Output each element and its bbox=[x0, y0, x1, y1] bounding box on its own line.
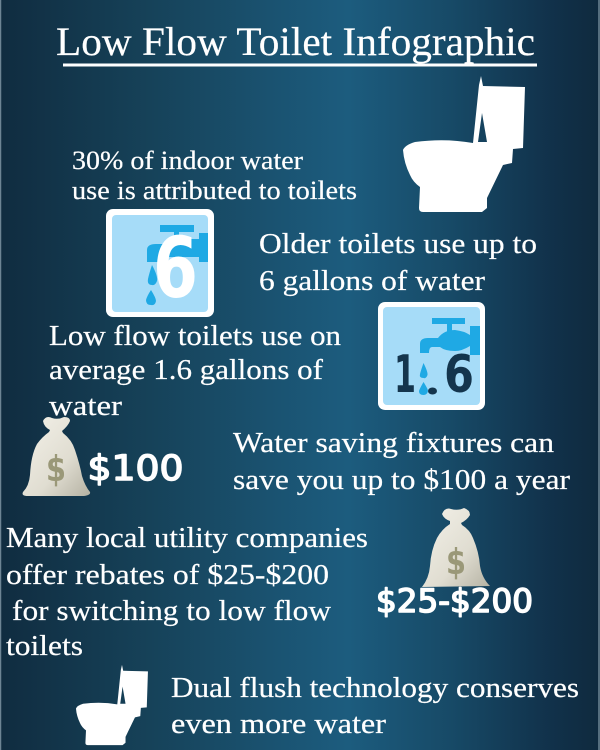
label: $100: $100 bbox=[88, 449, 184, 489]
text: older toilets: 6 gallons of water bbox=[259, 265, 485, 297]
text: water saving fixtures bbox=[233, 427, 570, 496]
text: utility rebates: for switching to low flow bbox=[12, 595, 331, 627]
icon: money bag rebates bbox=[422, 508, 490, 587]
text: dual flush: even more water bbox=[171, 708, 386, 740]
text: dual flush: Dual flush technology conserves bbox=[171, 672, 579, 704]
text: low flow average: average 1.6 gallons of bbox=[49, 354, 323, 386]
icon: faucet with 1.6: 6 bbox=[444, 345, 474, 405]
title: Low Flow Toilet Infographic bbox=[56, 19, 535, 64]
text: water saving fixtures: save you up to $100 a year bbox=[233, 464, 570, 496]
text: indoor water use: 30% of indoor water bbox=[72, 146, 303, 175]
text: indoor water use bbox=[72, 146, 357, 205]
icon: toilet large bbox=[403, 76, 525, 212]
text: utility rebates bbox=[6, 522, 368, 662]
text: dual flush bbox=[171, 672, 579, 740]
text: low flow average: Low flow toilets use on bbox=[49, 320, 342, 352]
icon: faucet with 6 bbox=[106, 209, 214, 317]
text: utility rebates: toilets bbox=[6, 630, 83, 662]
text: utility rebates: Many local utility companies bbox=[6, 522, 368, 554]
icon: toilet small bbox=[76, 665, 148, 745]
icon: money bag rebates: $ bbox=[446, 542, 466, 583]
icon: faucet with 1.6 bbox=[378, 302, 485, 410]
icon: faucet with 1.6: 1 bbox=[394, 345, 416, 405]
text: older toilets: Older toilets use up to bbox=[259, 228, 537, 260]
text: older toilets bbox=[259, 228, 537, 297]
text: low flow average: water bbox=[49, 390, 122, 422]
text: water saving fixtures: Water saving fixtures can bbox=[233, 427, 555, 459]
label: $25-$200: $25-$200 bbox=[376, 582, 533, 620]
text: utility rebates: offer rebates of $25-$200 bbox=[6, 559, 329, 591]
icon: money bag $100: $ bbox=[46, 449, 66, 490]
icon: faucet with 6: 6 bbox=[153, 219, 198, 317]
text: low flow average bbox=[49, 320, 342, 422]
icon: money bag $100 bbox=[23, 417, 90, 496]
text: indoor water use: use is attributed to toilets bbox=[72, 176, 357, 205]
